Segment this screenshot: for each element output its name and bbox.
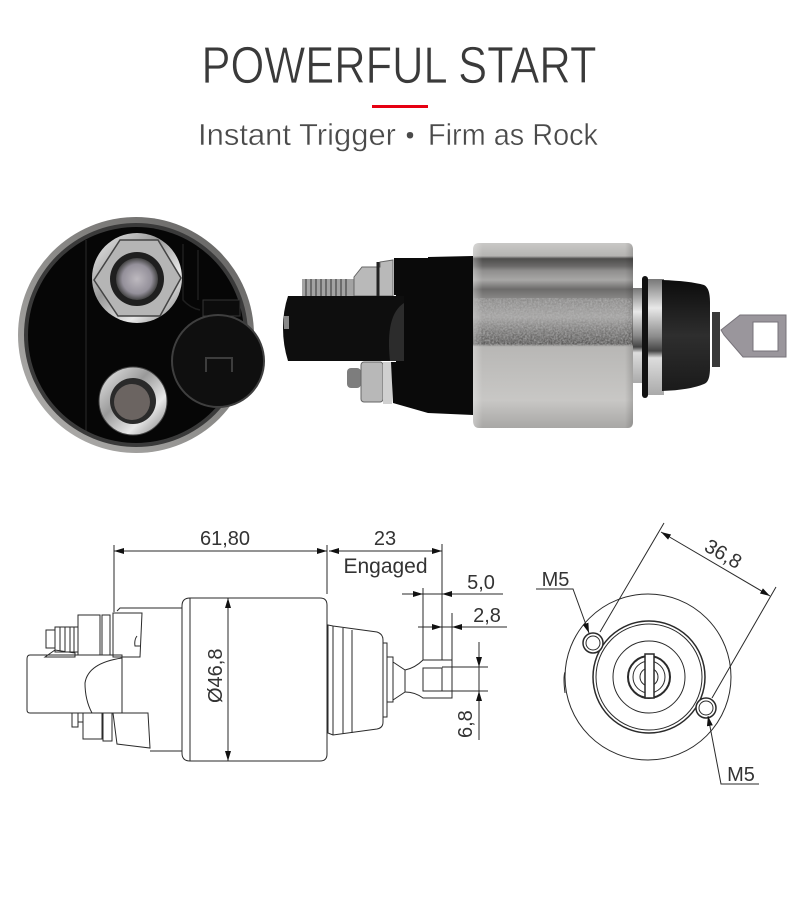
metal can [473, 243, 633, 428]
lower nut [72, 713, 112, 741]
technical drawing: front view [564, 594, 731, 760]
dimension: 61,80 [114, 528, 327, 612]
icon: round connector [172, 300, 264, 407]
mounting hole lower right [696, 698, 716, 718]
callout: M5 upper [536, 569, 589, 633]
lower stud and nut [347, 368, 361, 388]
black rear housing [391, 256, 473, 415]
subtitle: Instant Trigger [198, 117, 396, 152]
dimension: 36,8 [600, 523, 776, 698]
inner rings [593, 621, 705, 733]
body outline [182, 598, 327, 761]
subtitle: ・ [397, 121, 423, 151]
dimension: 2,8: 2,8 [473, 605, 501, 627]
dimension: 2,8 [418, 605, 507, 660]
subtitle [198, 117, 598, 152]
dimension: 6,8 [442, 642, 488, 740]
icon: lower nut [99, 367, 167, 435]
threaded stud [302, 279, 354, 297]
dimension: 5,0: 5,0 [467, 572, 495, 594]
title: POWERFUL START [202, 37, 596, 95]
callout: M5 lower: M5 [727, 764, 755, 786]
upper nut and stud [45, 615, 110, 657]
rubber boot [662, 280, 710, 391]
dimension: 23 Engaged: Engaged [343, 555, 428, 578]
callout: M5 upper: M5 [542, 569, 569, 591]
dimension: 23 Engaged [329, 528, 442, 660]
centre terminal [628, 654, 670, 698]
front boot [328, 625, 405, 735]
dimension: 61,80: 61,80 [200, 528, 250, 550]
icon: upper hex bolt [92, 233, 182, 323]
red accent line [372, 105, 428, 108]
collar and seal [633, 288, 647, 383]
dimension: 36,8: 36,8 [700, 535, 745, 574]
connector [27, 655, 122, 713]
technical drawing: side view [27, 598, 452, 761]
rear housing [113, 608, 182, 751]
upper nut [354, 260, 393, 296]
mounting hole upper left [583, 633, 603, 653]
outer flange [565, 594, 731, 760]
photo: solenoid side view [283, 243, 786, 428]
dimension: 6,8: 6,8 [455, 710, 477, 738]
dimension: diameter 46,8: Ø46,8 [205, 649, 227, 703]
spade terminal [721, 315, 786, 357]
dimension: 23 Engaged: 23 [374, 528, 396, 550]
callout: M5 lower [708, 716, 759, 786]
subtitle: Firm as Rock [428, 117, 598, 152]
spade [405, 660, 452, 698]
black connector [283, 296, 404, 361]
photo: solenoid end view [18, 217, 264, 453]
dimension: 5,0 [402, 572, 503, 660]
